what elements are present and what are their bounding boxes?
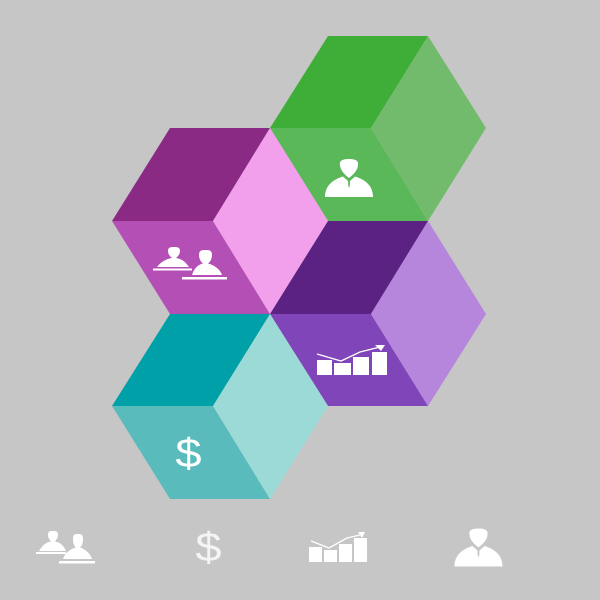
icon: dollar sign, legend: $	[195, 525, 222, 570]
icon: rising bar chart, legend	[309, 532, 367, 562]
panel: purple cube	[270, 221, 486, 406]
icon: person, legend	[454, 528, 502, 566]
icon: rising bar chart	[317, 345, 387, 375]
icon: two people at a desk, legend	[36, 531, 95, 564]
icon: two people at a desk	[153, 247, 227, 280]
icon row: legend	[36, 525, 502, 570]
icon: dollar sign: $	[175, 431, 202, 476]
panel: magenta cube	[112, 128, 328, 314]
panel: teal cube	[112, 314, 328, 499]
panel: green cube	[270, 36, 486, 221]
icon: person	[325, 159, 373, 197]
